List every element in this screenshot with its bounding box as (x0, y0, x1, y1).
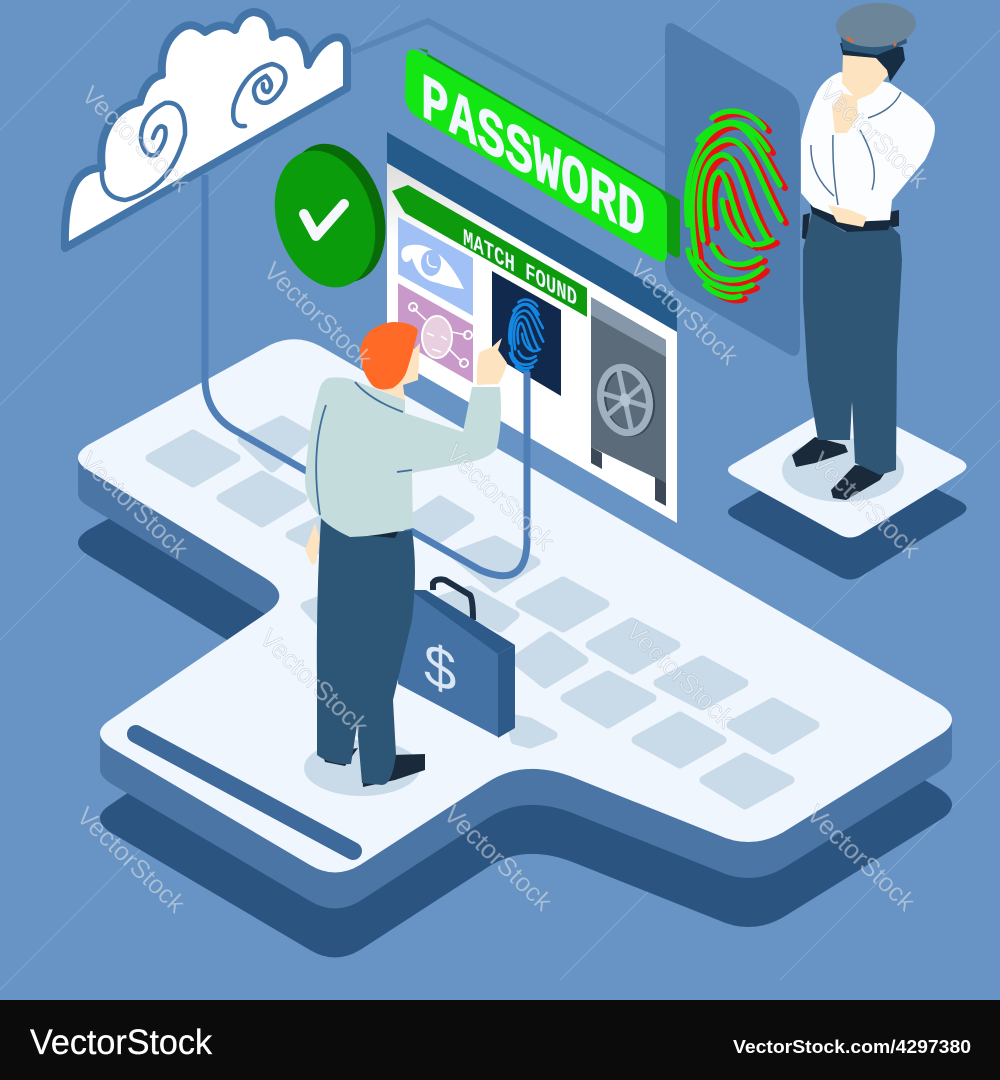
watermarks: VectorStock (254, 623, 375, 741)
platform shadow (78, 424, 952, 958)
guard head (842, 55, 890, 100)
match found text: MATCH FOUND (463, 224, 577, 314)
panel: fingerprint scanner (665, 23, 800, 356)
guard trousers (803, 212, 902, 475)
watermarks: VectorStock (440, 438, 561, 556)
shoes (322, 748, 425, 787)
footer id: VectorStock.com/4297380 (733, 1036, 971, 1057)
guard hands (828, 93, 867, 227)
guard floor shadow (782, 438, 904, 502)
guard cap (835, 1, 917, 55)
screen body (387, 163, 677, 523)
right platform (728, 402, 966, 538)
watermarks: VectorStock (258, 256, 379, 374)
long bar (136, 734, 353, 851)
main screen panel (387, 132, 677, 523)
eye tile (398, 217, 473, 316)
match found banner (392, 185, 587, 317)
cloud spirals (102, 64, 286, 200)
guard holster (802, 210, 899, 240)
belt (320, 517, 398, 538)
trousers (317, 518, 415, 785)
connector wire (205, 175, 527, 576)
right platform shadow (728, 444, 966, 580)
watermarks: VectorStock (801, 799, 922, 917)
hair (360, 322, 418, 389)
left hand (305, 523, 320, 565)
password sign (405, 48, 680, 262)
footer bar (0, 1000, 1000, 1080)
watermarks: VectorStock (806, 446, 927, 564)
guard belt (810, 203, 892, 232)
briefcase (398, 579, 515, 738)
connector wire to sign (352, 21, 668, 152)
icon: check mark (304, 204, 344, 236)
cloud (65, 12, 347, 248)
main figure (304, 322, 507, 796)
face recognition tile (398, 283, 473, 383)
watermarks: VectorStock (71, 801, 192, 919)
watermarks: VectorStock (814, 76, 935, 194)
pointing hand (477, 338, 507, 385)
watermarks: VectorStock (76, 80, 197, 198)
guard shoes (792, 437, 888, 500)
dollar sign: $ (424, 630, 456, 706)
floor shadow (304, 740, 420, 796)
skin head (380, 343, 420, 400)
check badge (259, 131, 402, 300)
guard hair (840, 43, 905, 82)
guard shirt (801, 72, 935, 222)
keyboard keys (150, 420, 815, 805)
safe wheel (595, 362, 658, 438)
guard figure (782, 1, 935, 502)
watermarks: VectorStock (74, 446, 195, 564)
platform side (78, 343, 952, 908)
fingerprint tile (492, 271, 561, 396)
platform top surface (78, 339, 952, 872)
watermarks: VectorStock (624, 253, 745, 371)
screen header strip (387, 132, 677, 332)
watermarks: VectorStock (620, 616, 741, 734)
password text: PASSWORD (421, 62, 645, 259)
watermarks (71, 76, 935, 919)
shirt (305, 377, 501, 537)
watermarks: VectorStock (438, 799, 559, 917)
footer logo: VectorStock (30, 1023, 212, 1062)
icon: coloured fingerprint (687, 111, 786, 300)
safe tile (591, 297, 666, 506)
